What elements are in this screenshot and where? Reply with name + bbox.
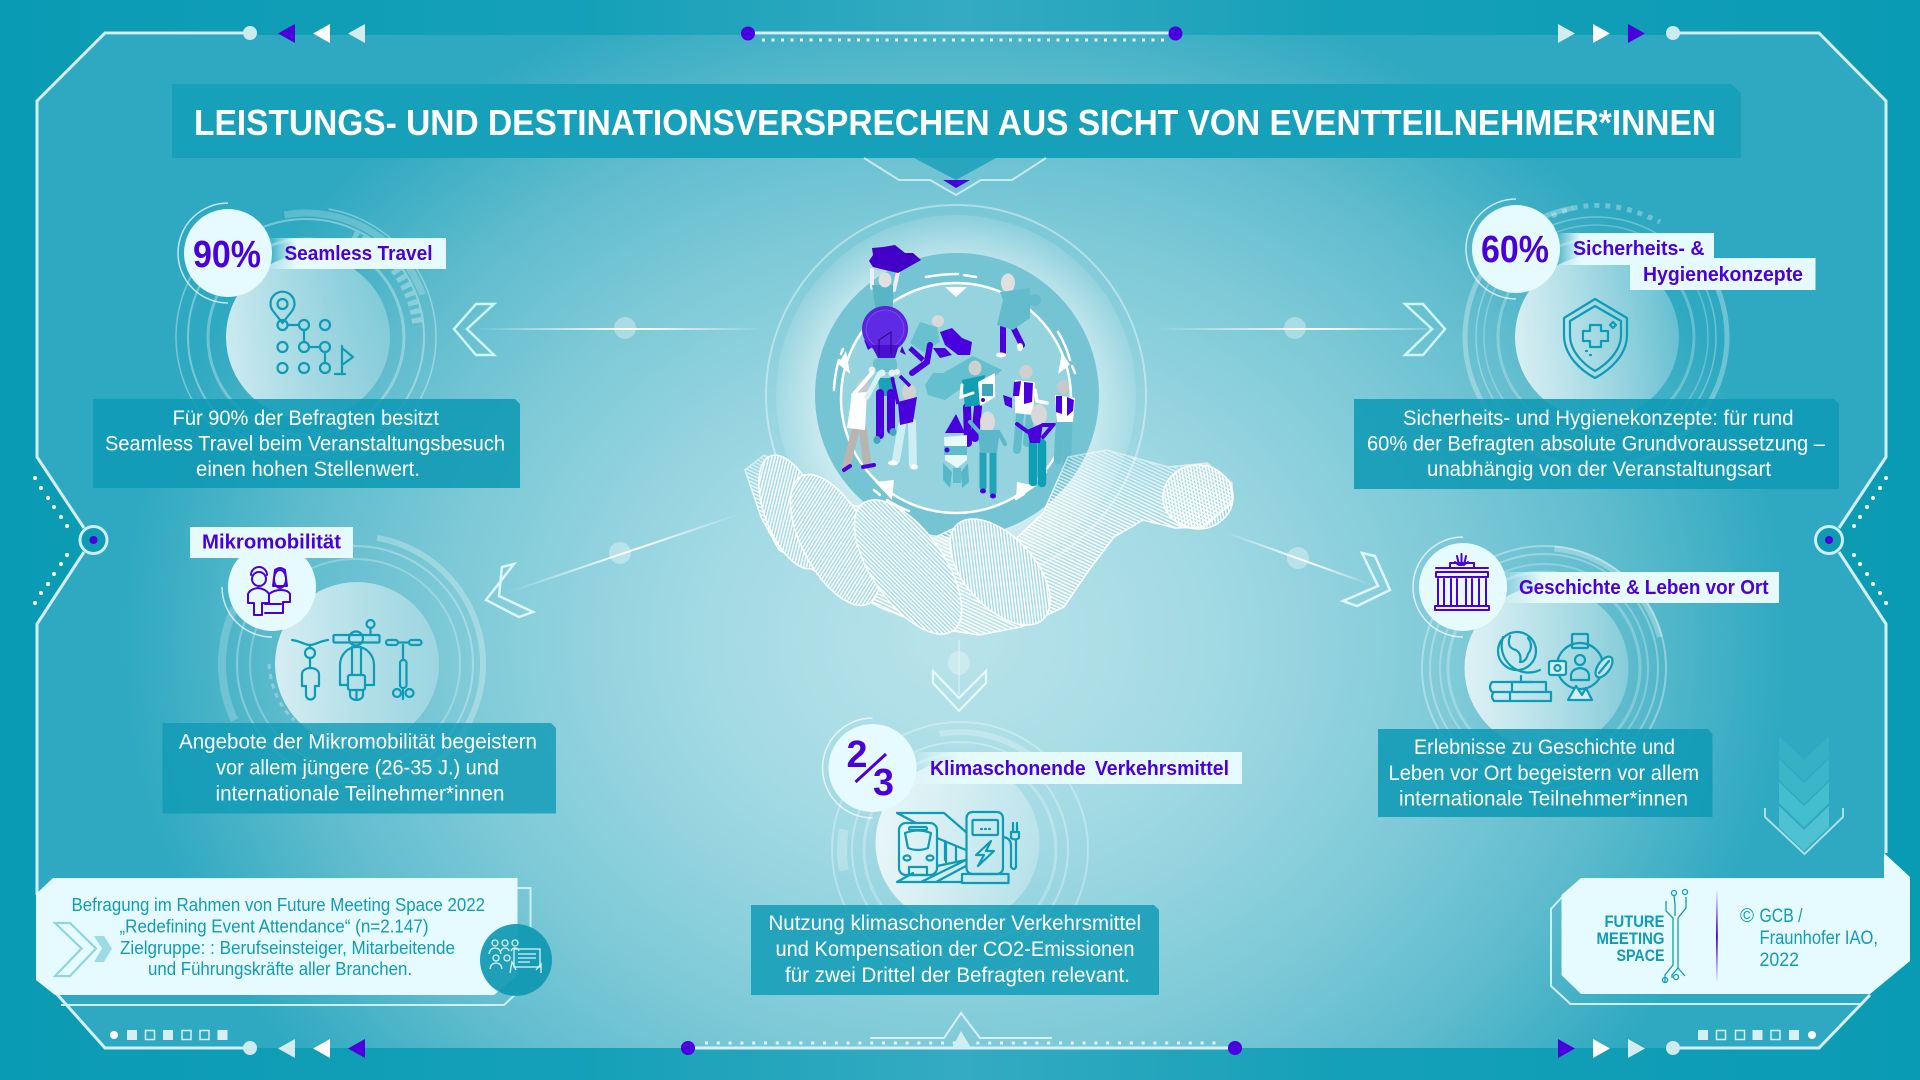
note background (36, 878, 518, 995)
lying figure with purple puzzle (910, 315, 972, 373)
badge (1466, 199, 1560, 299)
pinky (745, 446, 839, 578)
icon: brandenburg gate (1435, 554, 1489, 610)
copyright text (1740, 906, 1878, 971)
description text (179, 730, 537, 806)
logo wordmark (1596, 912, 1664, 965)
man with tablet (961, 360, 995, 443)
disc (1515, 255, 1679, 419)
description text: internationale Teilnehmer*innen (1399, 788, 1688, 810)
thumb (1163, 465, 1233, 529)
outline (61, 888, 530, 1005)
note text: „Redefining Event Attendance“ (n=2.147) (120, 916, 428, 936)
dotted arc (1552, 205, 1660, 222)
copyright text: 2022 (1760, 950, 1799, 971)
outline (1551, 897, 1862, 1004)
description text: und Kompensation der CO2-Emissionen (776, 938, 1134, 961)
disc (275, 582, 439, 746)
dashed arc (353, 236, 418, 327)
note text: und Führungskräfte aller Branchen. (148, 959, 412, 979)
lightbulb lifted by group (862, 306, 908, 444)
label (190, 527, 353, 558)
label (905, 752, 1242, 784)
description text: für zwei Drittel der Befragten relevant. (785, 964, 1130, 987)
bottom left arrowheads and squares (110, 1030, 365, 1058)
note text: Zielgruppe: : Berufseinsteiger, Mitarbeitende (120, 938, 455, 958)
description box (93, 399, 520, 488)
panel: climate friendly transport (751, 713, 1242, 995)
copyright text: © (1740, 906, 1754, 927)
copyright text: GCB / (1760, 906, 1803, 927)
label text: Seamless Travel (284, 242, 432, 265)
top centre line (741, 26, 1182, 40)
panel: micromobility (162, 487, 556, 841)
index finger (931, 501, 1069, 643)
logo circuit (1662, 890, 1688, 982)
copyright text: Fraunhofer IAO, (1760, 928, 1878, 949)
connector: right arrow (1155, 304, 1445, 355)
disc (876, 761, 1040, 925)
disc (226, 255, 390, 419)
icon: traveller (1549, 634, 1616, 700)
icon: bike (292, 640, 328, 700)
disc (1464, 586, 1628, 750)
connector: lower right arrow (1224, 532, 1390, 606)
centre illustration: people, puzzle, bulb and rocket (844, 245, 1075, 498)
woman from behind (970, 412, 1005, 498)
centre illustration: rings (766, 205, 1146, 585)
badge: 3 (873, 762, 894, 804)
frame: nodes and dots (33, 476, 1888, 605)
centre illustration: digital hand (745, 446, 1233, 652)
logo wordmark: FUTURE (1604, 912, 1664, 931)
panel: survey note (36, 878, 552, 1005)
badge: 60% (1481, 229, 1549, 271)
ring finger (772, 461, 898, 619)
rings (1411, 152, 1781, 522)
description text (1388, 736, 1699, 810)
rocket (943, 414, 969, 488)
top right arrowheads (1558, 24, 1680, 43)
label (1497, 572, 1779, 603)
description text: Sicherheits- und Hygienekonzepte: für rund (1403, 407, 1794, 430)
woman in purple front (1017, 404, 1053, 483)
rings (1414, 538, 1674, 798)
icon: train and charging station (897, 812, 1019, 883)
description text: Leben vor Ort begeistern vor allem (1388, 762, 1699, 785)
badge (1413, 537, 1507, 637)
icon: shield (1564, 299, 1627, 378)
description text (1367, 407, 1825, 481)
divider (1716, 889, 1718, 983)
decorative down chevrons (1765, 736, 1843, 854)
description text: unabhängig von der Veranstaltungsart (1427, 458, 1771, 481)
title text: LEISTUNGS- UND DESTINATIONSVERSPRECHEN AUS SICHT VON EVENTTEILNEHMER*INNEN (194, 102, 1716, 143)
description text: Erlebnisse zu Geschichte und (1414, 736, 1675, 759)
bottom centre line (681, 1013, 1242, 1055)
panel: logo and copyright (1551, 853, 1910, 1004)
rings (178, 487, 532, 841)
description text: einen hohen Stellenwert. (196, 458, 420, 481)
label text: Hygienekonzepte (1643, 263, 1803, 286)
label text: Klimaschonende Verkehrsmittel (930, 757, 1229, 780)
description text: internationale Teilnehmer*innen (216, 782, 504, 806)
badge: 90% (193, 234, 261, 276)
note text: Befragung im Rahmen von Future Meeting Space 2022 (72, 895, 485, 915)
rings (823, 713, 1097, 987)
bottom right arrowheads and squares (1558, 1030, 1816, 1058)
badge (178, 203, 272, 303)
description text: Angebote der Mikromobilität begeistern (179, 730, 537, 754)
description box (1378, 729, 1712, 817)
connector: lower left arrow (486, 514, 740, 617)
logo wordmark: MEETING (1596, 929, 1664, 948)
dashed arc (269, 664, 294, 720)
description box (162, 723, 556, 814)
figure with large puzzle (996, 274, 1041, 358)
connector: left arrow (454, 304, 765, 355)
label text: Mikromobilität (202, 530, 341, 554)
icon: young people (248, 567, 290, 615)
middle finger (834, 482, 982, 652)
description text: Nutzung klimaschonender Verkehrsmittel (768, 912, 1141, 935)
note text (72, 895, 485, 979)
palm (745, 450, 1232, 635)
icon: kick scooter (386, 640, 422, 699)
badge: 2 (846, 734, 868, 776)
label second line (1630, 258, 1816, 290)
panel: hygiene concepts (1354, 152, 1839, 522)
man in white lifting bulb (844, 373, 880, 470)
description text: Seamless Travel beim Veranstaltungsbesuch (105, 432, 505, 456)
logo wordmark: SPACE (1616, 946, 1664, 965)
connector: down arrow (933, 640, 986, 711)
figure holding puzzle (869, 245, 921, 312)
label text (1573, 237, 1803, 286)
top left arrowheads (243, 24, 365, 43)
description text: 60% der Befragten absolute Grundvoraussetzung – (1367, 432, 1825, 456)
description text (105, 407, 505, 481)
man on the right (1055, 380, 1075, 465)
rings (155, 186, 457, 488)
icon: audience circle (480, 924, 552, 996)
woman in purple (888, 376, 918, 470)
badge (222, 543, 316, 637)
chevrons (55, 923, 112, 976)
icon: motor scooter (334, 620, 380, 700)
panel: history and local life (1378, 537, 1779, 817)
icon: route map (270, 292, 353, 374)
panel background (1562, 853, 1910, 994)
woman in white and purple vest (1003, 365, 1047, 450)
description text (768, 912, 1141, 987)
description box (1354, 399, 1839, 489)
label text: Sicherheits- & (1573, 237, 1705, 260)
teal puzzle on floor (925, 356, 1002, 400)
label (268, 238, 446, 269)
title banner (172, 84, 1741, 158)
label text: Geschichte & Leben vor Ort (1519, 576, 1769, 599)
label first line (1555, 233, 1714, 265)
icon: globe on books (1490, 632, 1551, 701)
banner pointer (864, 158, 1046, 195)
description text: vor allem jüngere (26-35 J.) und (216, 756, 499, 780)
description text: Für 90% der Befragten besitzt (173, 407, 439, 430)
description box (751, 905, 1159, 995)
panel: seamless travel (93, 186, 520, 488)
badge (823, 718, 916, 818)
